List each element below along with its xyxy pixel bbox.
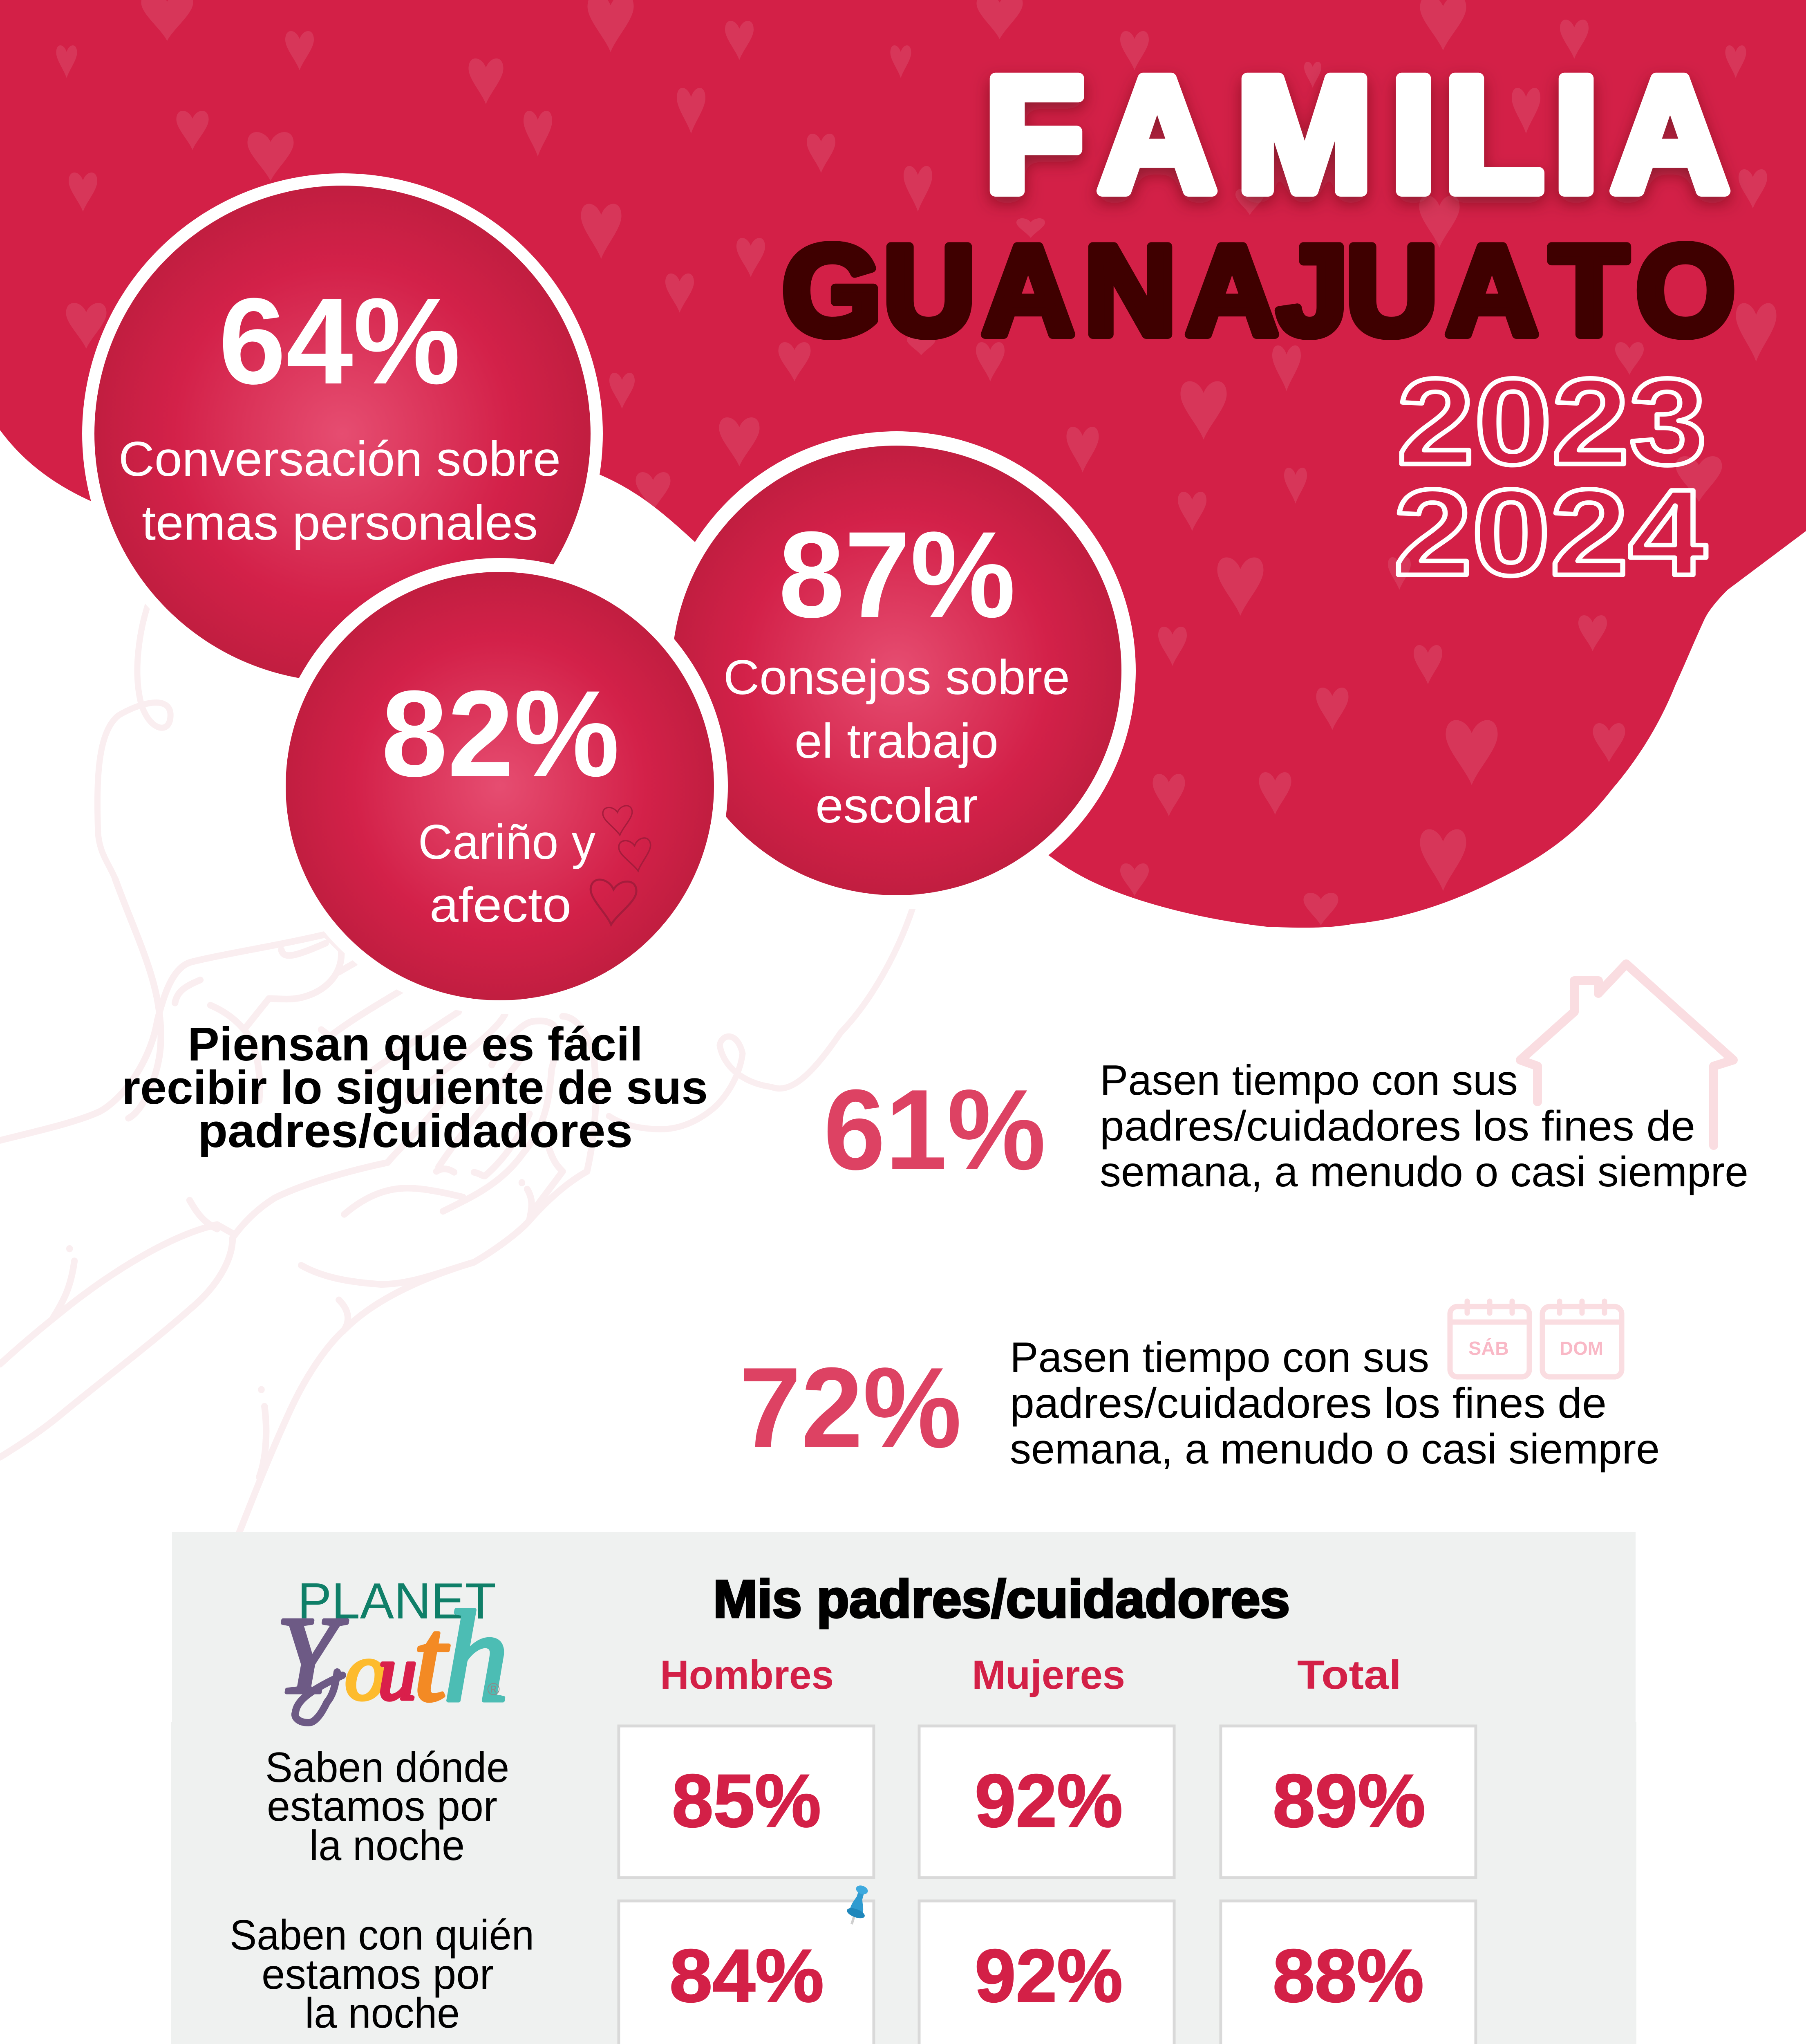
stat: 72%: padres/cuidadores los fines de (1010, 1380, 1607, 1427)
row 2 values: 84% (669, 1934, 824, 2017)
logo: Planet Youth: t (414, 1594, 451, 1726)
circle: 87% school advice: el trabajo (794, 714, 998, 769)
stat: 61%: 61% (824, 1066, 1046, 1194)
row 2 values (669, 1934, 1424, 2017)
title: 2023: 2023 (1397, 353, 1707, 490)
stat: 61% (824, 1057, 1748, 1196)
column header: Mujeres: Mujeres (972, 1652, 1125, 1697)
title: 2024: 2024 (1394, 464, 1708, 601)
title (782, 43, 1735, 601)
logo: Planet Youth: h (443, 1585, 509, 1729)
icon: weekend calendars (1450, 1301, 1622, 1377)
row 1 values: 92% (975, 1759, 1123, 1842)
heading: Piensan que es facil: Piensan que es fácil (188, 1018, 643, 1071)
logo: Planet Youth: PLANET (298, 1573, 496, 1629)
icon: calendar DOM (1542, 1301, 1622, 1377)
red blob background (0, 0, 1806, 928)
circle: 82% affection: Cariño y (418, 815, 595, 870)
heading: Piensan que es facil (122, 1018, 708, 1157)
column header: Total: Total (1297, 1652, 1401, 1697)
background line art: hands (0, 590, 915, 1533)
logo: Planet Youth (276, 1573, 509, 1729)
circle: 87% school advice: escolar (815, 778, 978, 833)
stat: 72%: 72% (739, 1344, 962, 1472)
stat: 61%: padres/cuidadores los fines de (1100, 1103, 1695, 1150)
circle: 82% affection: afecto (430, 878, 571, 932)
logo: Planet Youth: Y (276, 1594, 349, 1717)
row label: Saben donde: estamos por (267, 1783, 497, 1830)
circle: 64% conversation (82, 173, 603, 694)
heading: Mis padres/cuidadores: Mis padres/cuidadores (713, 1569, 1290, 1629)
row 1 values (672, 1759, 1426, 1842)
row label: Saben donde (265, 1744, 509, 1869)
stat: 61%: Pasen tiempo con sus (1100, 1057, 1518, 1104)
circle: 87% school advice: Consejos sobre (723, 650, 1070, 705)
circle: 64% conversation: Conversación sobre (119, 432, 561, 486)
title: FAMILIA: FAMILIA (985, 43, 1729, 226)
row 2 values: 92% (975, 1934, 1123, 2017)
row label: Saben con quien: estamos por (262, 1951, 494, 1998)
table values (668, 1759, 1426, 2044)
heading: Piensan que es facil: recibir lo siguiente de sus (122, 1061, 708, 1114)
line art: hands and arms (0, 879, 596, 1533)
stat: 72% (739, 1334, 1660, 1473)
row label: Saben donde: Saben dónde (265, 1744, 509, 1791)
row label: Saben donde: la noche (309, 1822, 465, 1869)
panel: table board (171, 1532, 1636, 2044)
logo: Planet Youth: u (378, 1630, 417, 1716)
title: GUANAJUATO: GUANAJUATO (782, 220, 1735, 362)
circle: 82% affection (272, 558, 728, 1014)
row 2 values: 88% (1273, 1934, 1424, 2017)
background hearts pattern (56, 0, 1776, 926)
row label: Saben con quien: Saben con quién (230, 1912, 534, 1959)
stat: 61%: semana, a menudo o casi siempre (1100, 1148, 1748, 1196)
logo: Planet Youth: ® (487, 1679, 500, 1699)
icon: calendar SAB (1450, 1301, 1529, 1377)
table cells (619, 1726, 1476, 2044)
circle: 64% conversation: 64% (219, 272, 461, 410)
icon: calendar DOM: DOM (1560, 1338, 1603, 1359)
row label: Saben con quien (230, 1912, 534, 2037)
circle: 82% affection: 82% (381, 665, 620, 802)
stat: 72%: Pasen tiempo con sus (1010, 1334, 1429, 1381)
icon: house (1520, 964, 1733, 1145)
logo: Planet Youth: o (345, 1627, 386, 1717)
icon: outline hearts (588, 805, 654, 926)
circle: 87% school advice (658, 431, 1136, 910)
line art: upper strand (97, 590, 915, 1129)
circle: 87% school advice: 87% (779, 506, 1016, 643)
icon: push pin (846, 1884, 869, 1924)
row 1 values: 85% (672, 1759, 821, 1842)
column header: Hombres: Hombres (660, 1652, 834, 1697)
heading: Piensan que es facil: padres/cuidadores (198, 1104, 633, 1157)
row 1 values: 89% (1273, 1759, 1426, 1842)
row label: Saben con quien: la noche (305, 1990, 460, 2037)
circle: 64% conversation: temas personales (142, 495, 538, 550)
stat: 72%: semana, a menudo o casi siempre (1010, 1425, 1660, 1473)
icon: calendar SAB: SÁB (1468, 1338, 1509, 1359)
